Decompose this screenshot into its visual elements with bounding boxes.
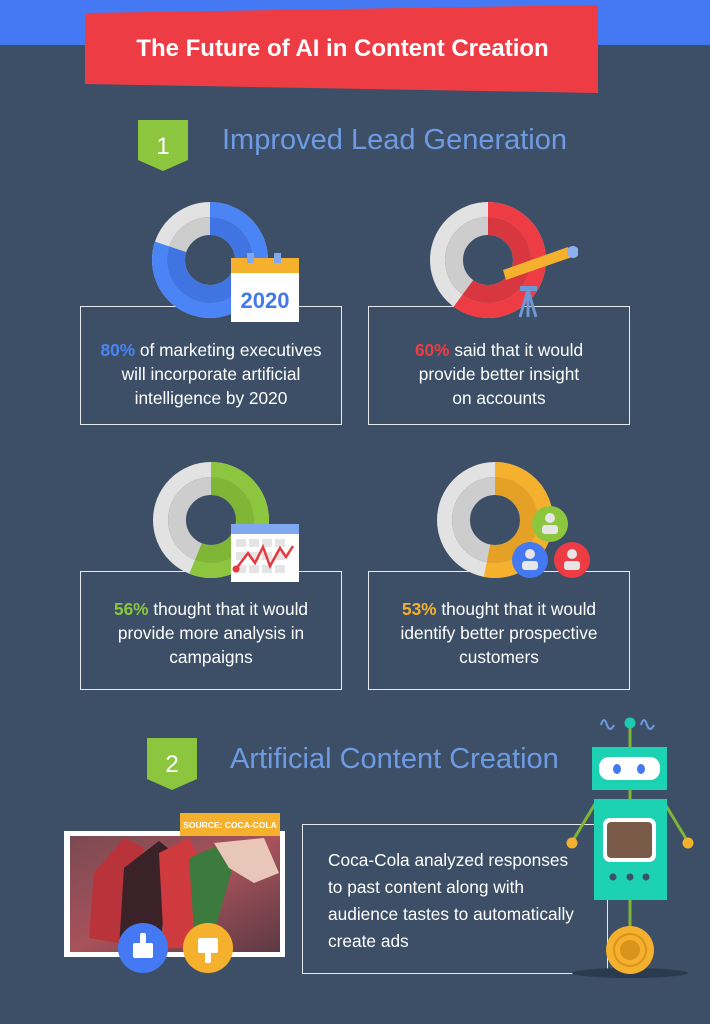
text box: coca-cola: to past content along with	[328, 877, 524, 897]
box 4	[368, 571, 630, 690]
photo: coca-cola	[64, 813, 285, 973]
title: The Future of AI in Content Creation	[136, 35, 549, 62]
donut 2 with telescope	[430, 202, 578, 318]
badge 2	[147, 738, 197, 790]
donut 3 with chart	[153, 462, 299, 582]
box 1: intelligence by 2020	[135, 388, 287, 408]
donut 1 with calendar	[152, 202, 299, 322]
box 1: 80% of marketing executives	[101, 340, 321, 360]
photo: coca-cola: SOURCE: COCA-COLA	[183, 820, 277, 830]
box 1	[80, 306, 342, 425]
box 3: campaigns	[169, 647, 253, 667]
box 2: provide better insight	[419, 364, 579, 384]
badge 1	[138, 120, 188, 171]
box 1: will incorporate artificial	[122, 364, 300, 384]
donut 4 with people	[437, 462, 590, 578]
box 4: identify better prospective	[401, 623, 597, 643]
donut 1 with calendar: 2020	[241, 288, 289, 313]
badge 2: 2	[165, 751, 179, 778]
text box: coca-cola: create ads	[328, 931, 409, 951]
text box: coca-cola: Coca-Cola analyzed responses	[328, 850, 568, 870]
heading 2: Artificial Content Creation	[230, 743, 559, 775]
box 4: customers	[459, 647, 539, 667]
box 2	[368, 306, 630, 425]
heading 1: Improved Lead Generation	[222, 124, 567, 156]
box 2: 60% said that it would	[415, 340, 583, 360]
box 3: 56% thought that it would	[114, 599, 308, 619]
box 4: 53% thought that it would	[402, 599, 596, 619]
badge 1: 1	[156, 133, 170, 160]
text box: coca-cola	[302, 824, 608, 974]
box 3	[80, 571, 342, 690]
title banner	[85, 5, 598, 93]
text box: coca-cola: audience tastes to automatically	[328, 904, 574, 924]
box 3: provide more analysis in	[118, 623, 304, 643]
robot	[566, 718, 694, 978]
box 2: on accounts	[452, 388, 546, 408]
top blue band	[0, 0, 710, 45]
